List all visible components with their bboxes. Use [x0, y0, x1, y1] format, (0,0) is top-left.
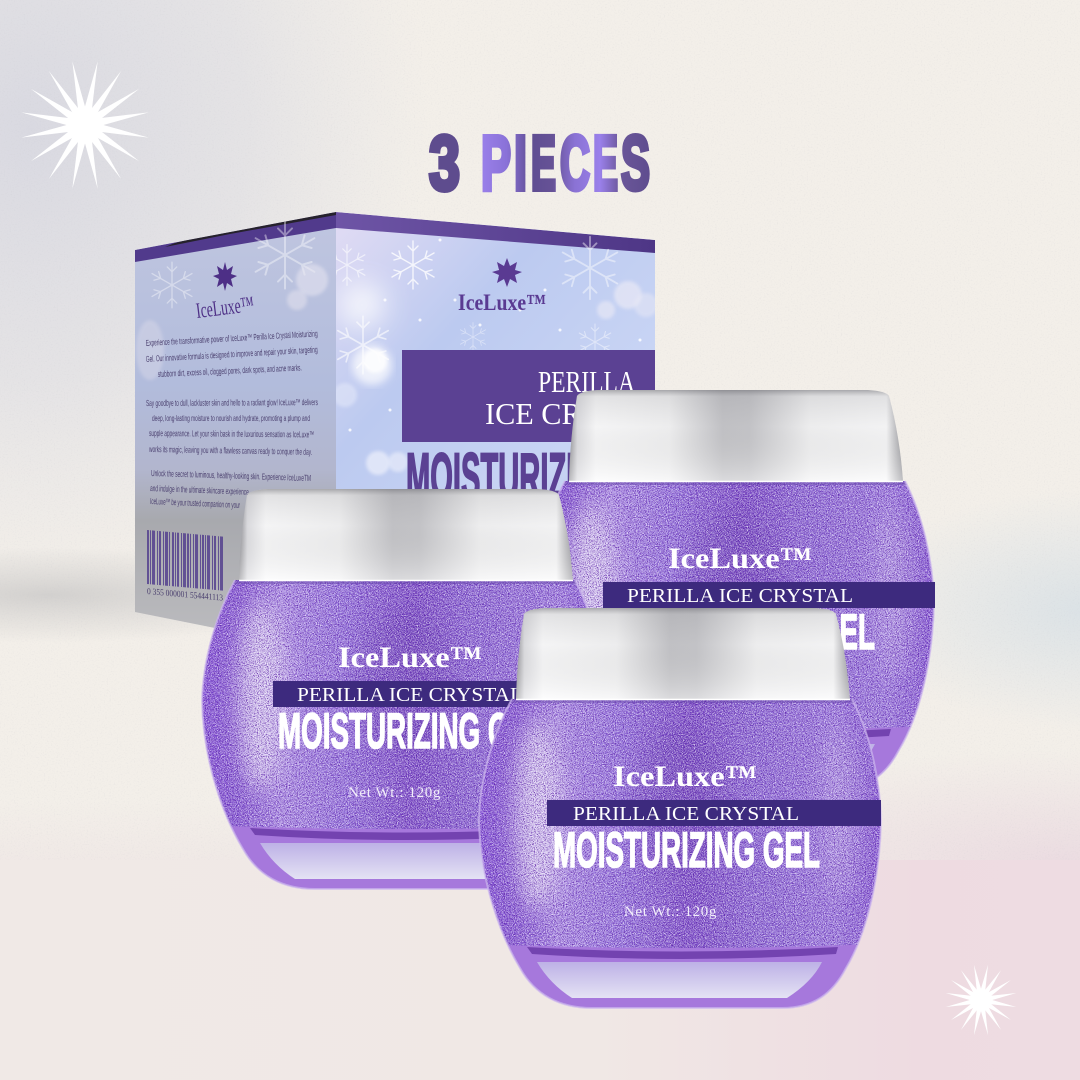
jar label text: MOISTURIZING GEL	[608, 604, 875, 660]
box side description: stubborn dirt, excess oil, clogged pores, dark spots, and acne marks.	[158, 362, 302, 379]
barcode	[147, 557, 223, 603]
jar label text: IceLuxe™	[668, 542, 812, 575]
box front face	[336, 212, 655, 494]
box side logo	[195, 262, 255, 323]
jar label text: IceLuxe™	[338, 641, 482, 674]
title: 3 PIECES: E	[531, 120, 556, 206]
box side description: supple appearance. Let your skin bask in the luxurious sensation as IceLuxe™	[149, 428, 314, 439]
box side description: and indulge in the ultimate skincare experience.	[150, 483, 250, 497]
jar label text: Net Wt.: 120g	[348, 785, 441, 801]
title: 3 PIECES: S	[621, 120, 650, 206]
box front purple label: ICE CRYSTAL	[485, 396, 675, 431]
title: 3 PIECES: 3	[429, 120, 460, 206]
jar label text: PERILLA ICE CRYSTAL	[297, 685, 523, 706]
box left face	[135, 212, 336, 640]
jar label text	[273, 641, 605, 801]
jar label text: PERILLA ICE CRYSTAL	[627, 586, 853, 607]
title: 3 PIECES: C	[560, 120, 590, 206]
jar label text	[547, 760, 881, 920]
box side description: Gel. Our innovative formula is designed to improve and repair your skin, targeting	[146, 344, 318, 364]
jar label text	[603, 542, 935, 660]
box side logo: IceLuxe™	[195, 292, 255, 323]
jar: front	[478, 608, 882, 1010]
box front face: MOISTURIZING	[406, 439, 618, 513]
jar label text: Net Wt.: 120g	[624, 904, 717, 920]
jar label text: MOISTURIZING GEL	[278, 703, 545, 759]
box side description: works its magic, leaving you with a flawless canvas ready to conquer the day.	[148, 444, 312, 457]
box front logo	[458, 258, 546, 315]
title: 3 PIECES: E	[593, 120, 618, 206]
box front purple label: PERILLA	[538, 364, 635, 399]
title: 3 PIECES: I	[514, 120, 527, 206]
title: 3 PIECES: P	[481, 120, 511, 206]
title: 3 PIECES	[429, 120, 650, 206]
jar: back right	[531, 390, 935, 792]
barcode: 0 355 000001 554441113	[147, 586, 223, 603]
jar label text: PERILLA ICE CRYSTAL	[573, 804, 799, 825]
box side description: Experience the transformative power of IceLuxe™ Perilla Ice Crystal Moisturizing	[146, 328, 318, 348]
product box	[135, 212, 675, 640]
icon: small sparkle star, bottom right	[945, 964, 1017, 1036]
box side description: deep, long-lasting moisture to nourish and hydrate, promoting a plump and	[152, 413, 310, 423]
jar label text: MOISTURIZING GEL	[553, 822, 820, 878]
jar label text: IceLuxe™	[613, 760, 757, 793]
icon: large sparkle star, top left	[20, 60, 150, 190]
box front purple label	[402, 350, 675, 442]
jar: left	[201, 489, 605, 891]
box side description: Say goodbye to dull, lackluster skin and hello to a radiant glow! IceLuxe™ delivers	[146, 397, 318, 408]
box front logo: IceLuxe™	[458, 290, 546, 315]
box side description	[146, 328, 318, 510]
box side description: IceLuxe™ be your trusted companion on your	[150, 496, 240, 510]
box side description: Unlock the secret to luminous, healthy-looking skin. Experience IceLuxeTM	[151, 468, 311, 483]
